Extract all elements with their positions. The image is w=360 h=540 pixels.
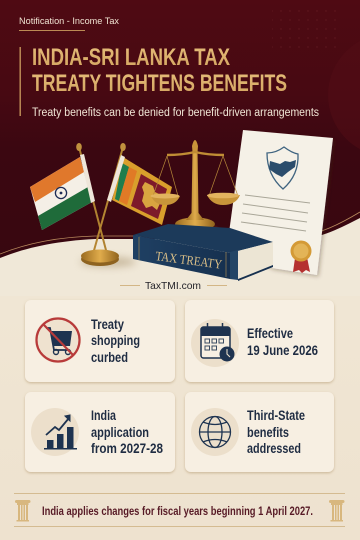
card text xyxy=(91,316,140,365)
card text xyxy=(91,407,163,456)
card: effective date xyxy=(185,300,334,382)
card: third-state benefits xyxy=(185,392,334,472)
card: treaty shopping curbed xyxy=(25,300,175,382)
brand: TaxTMI.com xyxy=(120,280,227,292)
illustration: document xyxy=(228,130,333,275)
card text: shopping xyxy=(91,332,140,348)
eyebrow label: Notification - Income Tax xyxy=(19,16,119,27)
card text: benefits xyxy=(247,424,289,440)
icon: rising bar chart xyxy=(31,408,79,456)
card text: curbed xyxy=(91,349,128,365)
illustration: book xyxy=(133,224,273,281)
background: maroon header xyxy=(0,0,360,270)
brand: TaxTMI.com: TaxTMI.com xyxy=(145,280,201,292)
card text: addressed xyxy=(247,440,301,456)
icon: globe xyxy=(191,408,239,456)
card text: application xyxy=(91,424,149,440)
title: INDIA-SRI LANKA TAX xyxy=(32,44,230,71)
card: India application xyxy=(25,392,175,472)
card text: India xyxy=(91,407,116,423)
Sri Lanka flag xyxy=(107,155,172,225)
card text xyxy=(247,407,305,456)
illustration: flags xyxy=(30,143,172,267)
title xyxy=(32,44,287,97)
card text: Treaty xyxy=(91,316,124,332)
table surface xyxy=(0,212,360,300)
icon: calendar xyxy=(191,319,239,367)
icon: no cart xyxy=(35,317,81,363)
illustration: scales xyxy=(150,140,240,235)
book title: TAX TREATY xyxy=(155,248,224,272)
card text: from 2027-28 xyxy=(91,440,163,456)
background: decorative circle xyxy=(328,33,360,157)
card text: Third-State xyxy=(247,407,305,423)
flag stand xyxy=(81,250,119,266)
lower section background xyxy=(0,296,360,540)
India flag xyxy=(30,154,95,230)
footer strip xyxy=(14,493,345,527)
shield icon xyxy=(267,147,298,189)
subtitle: Treaty benefits can be denied for benefit-driven arrangements xyxy=(32,107,319,119)
icon: column left xyxy=(15,500,30,522)
seal and ribbon xyxy=(290,240,312,273)
card text xyxy=(247,325,318,358)
dot pattern xyxy=(272,8,338,54)
title block xyxy=(20,44,319,119)
card text: 19 June 2026 xyxy=(247,342,318,358)
icon: column right xyxy=(329,500,344,522)
card text: Effective xyxy=(247,325,293,341)
